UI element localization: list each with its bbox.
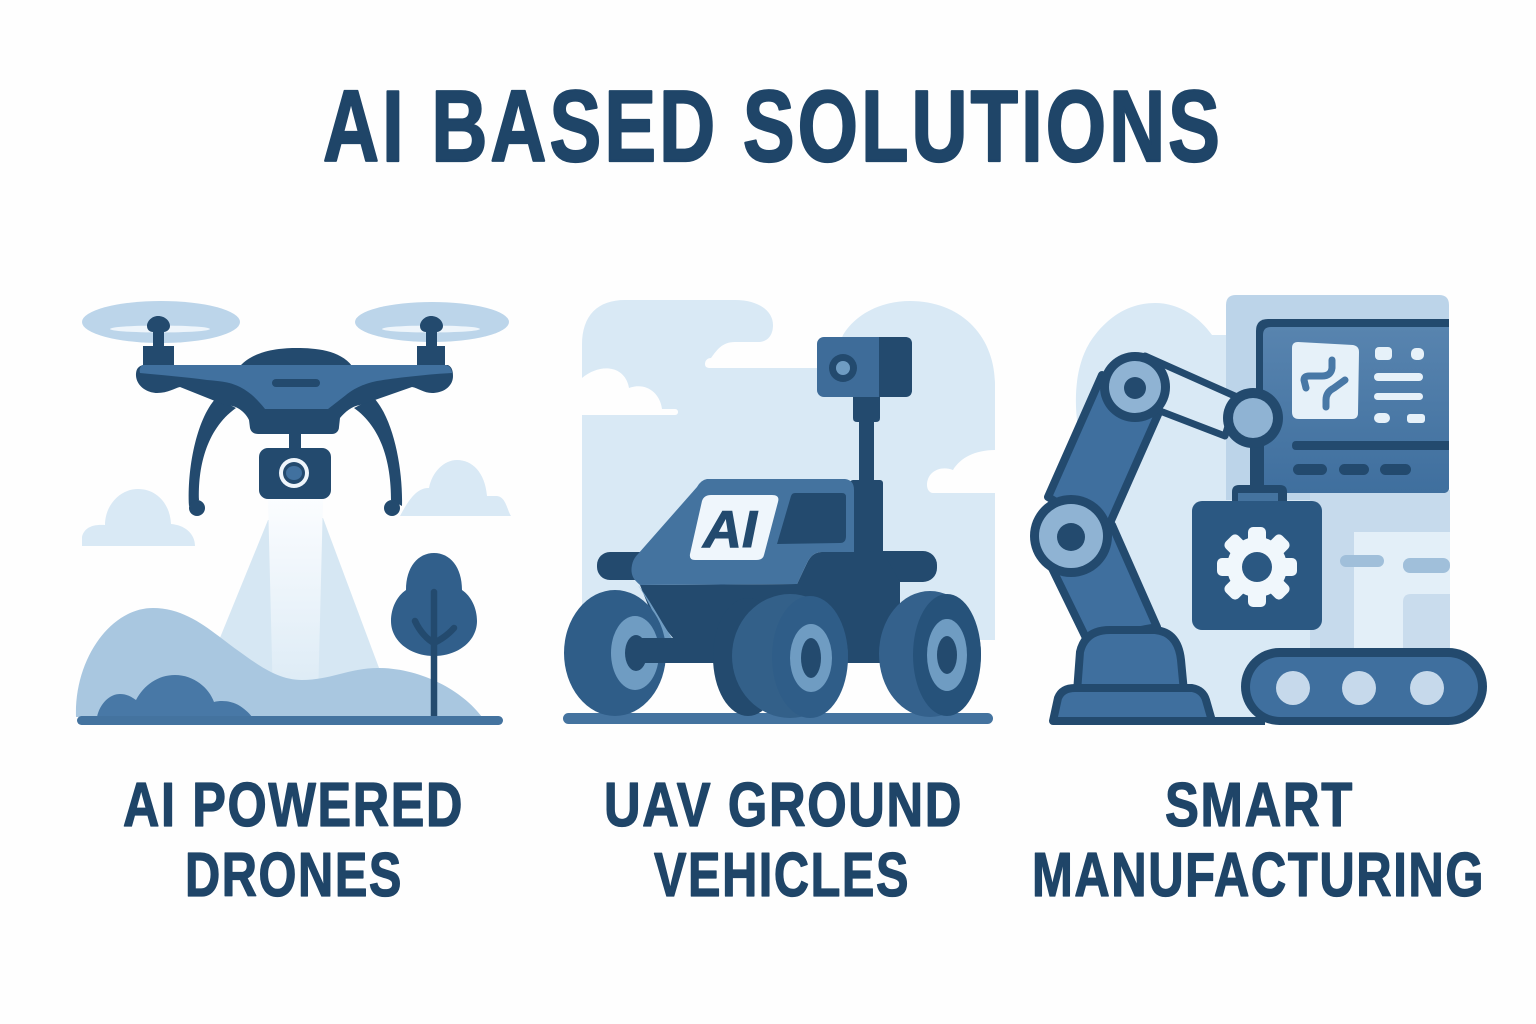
- label: AI powered drones: AI POWERED: [123, 771, 464, 840]
- label: smart manufacturing: [1032, 771, 1485, 910]
- illustration: robot arm and factory: [1030, 295, 1487, 725]
- icon: right propeller: [355, 302, 509, 342]
- label: AI powered drones: DRONES: [185, 841, 403, 910]
- tree: [391, 553, 477, 716]
- ground line: [1205, 717, 1265, 725]
- left wheel: [564, 590, 674, 716]
- ground line: [563, 713, 993, 724]
- screen data rows: [1374, 347, 1425, 423]
- AI badge: AI: [701, 501, 759, 559]
- bushes: [97, 675, 252, 717]
- panel: UAV ground vehicles: [563, 300, 995, 910]
- label: smart manufacturing: SMART: [1165, 771, 1354, 840]
- icon: left cloud: [82, 489, 195, 546]
- sky background: [582, 300, 995, 640]
- shoulder joint: [1100, 352, 1170, 422]
- arm base tower: [1077, 630, 1184, 692]
- screen tile with circuit icon: [1292, 342, 1359, 419]
- AI badge: [690, 495, 778, 560]
- elbow joint: [1030, 495, 1112, 577]
- rover cabin: [631, 479, 854, 585]
- factory wall: [1226, 295, 1450, 655]
- arm base plinth: [1053, 688, 1212, 721]
- label: AI powered drones: [123, 771, 464, 910]
- panel: AI powered drones: [76, 301, 511, 910]
- icon: left propeller: [82, 301, 240, 343]
- white gaps beneath chassis: [650, 640, 930, 713]
- icon: white cloud left: [582, 368, 678, 415]
- cabin window: [777, 493, 846, 544]
- chassis: [640, 552, 900, 663]
- hills: [76, 608, 482, 717]
- icon: white cloud right: [927, 450, 995, 493]
- icon: right cloud: [400, 460, 511, 516]
- forearm link: [1145, 356, 1237, 436]
- right wheel: [879, 591, 981, 717]
- lower arm: [1048, 525, 1157, 640]
- title: AI BASED SOLUTIONS: [323, 71, 1223, 183]
- conveyor belt: [1241, 648, 1487, 725]
- ground line: [77, 716, 503, 725]
- side bars: [597, 551, 937, 582]
- wrist joint: [1223, 388, 1283, 448]
- centre wheel: [713, 594, 848, 718]
- label: UAV ground vehicles: UAV GROUND: [604, 771, 963, 840]
- illustration: ground rover: [563, 300, 995, 724]
- screen status bars: [1292, 441, 1449, 475]
- drone: [136, 316, 453, 516]
- camera scan beam: [215, 499, 391, 700]
- camera mast: [850, 395, 883, 560]
- icon: rover camera: [817, 337, 912, 397]
- fender sliver: [638, 585, 672, 638]
- label: UAV ground vehicles: VEHICLES: [654, 841, 910, 910]
- monitor: [1256, 319, 1449, 493]
- illustration: drone over landscape: [76, 301, 511, 725]
- gripper box: [1192, 501, 1322, 630]
- label: UAV ground vehicles: [604, 771, 963, 910]
- icon: drone camera: [259, 448, 331, 499]
- wrist rod: [1250, 440, 1264, 490]
- pale backdrop: [1076, 303, 1310, 718]
- panel: smart manufacturing: [1030, 295, 1487, 910]
- gripper connector: [1232, 485, 1287, 505]
- upper arm: [1048, 375, 1160, 532]
- icon: gear: [1217, 527, 1297, 607]
